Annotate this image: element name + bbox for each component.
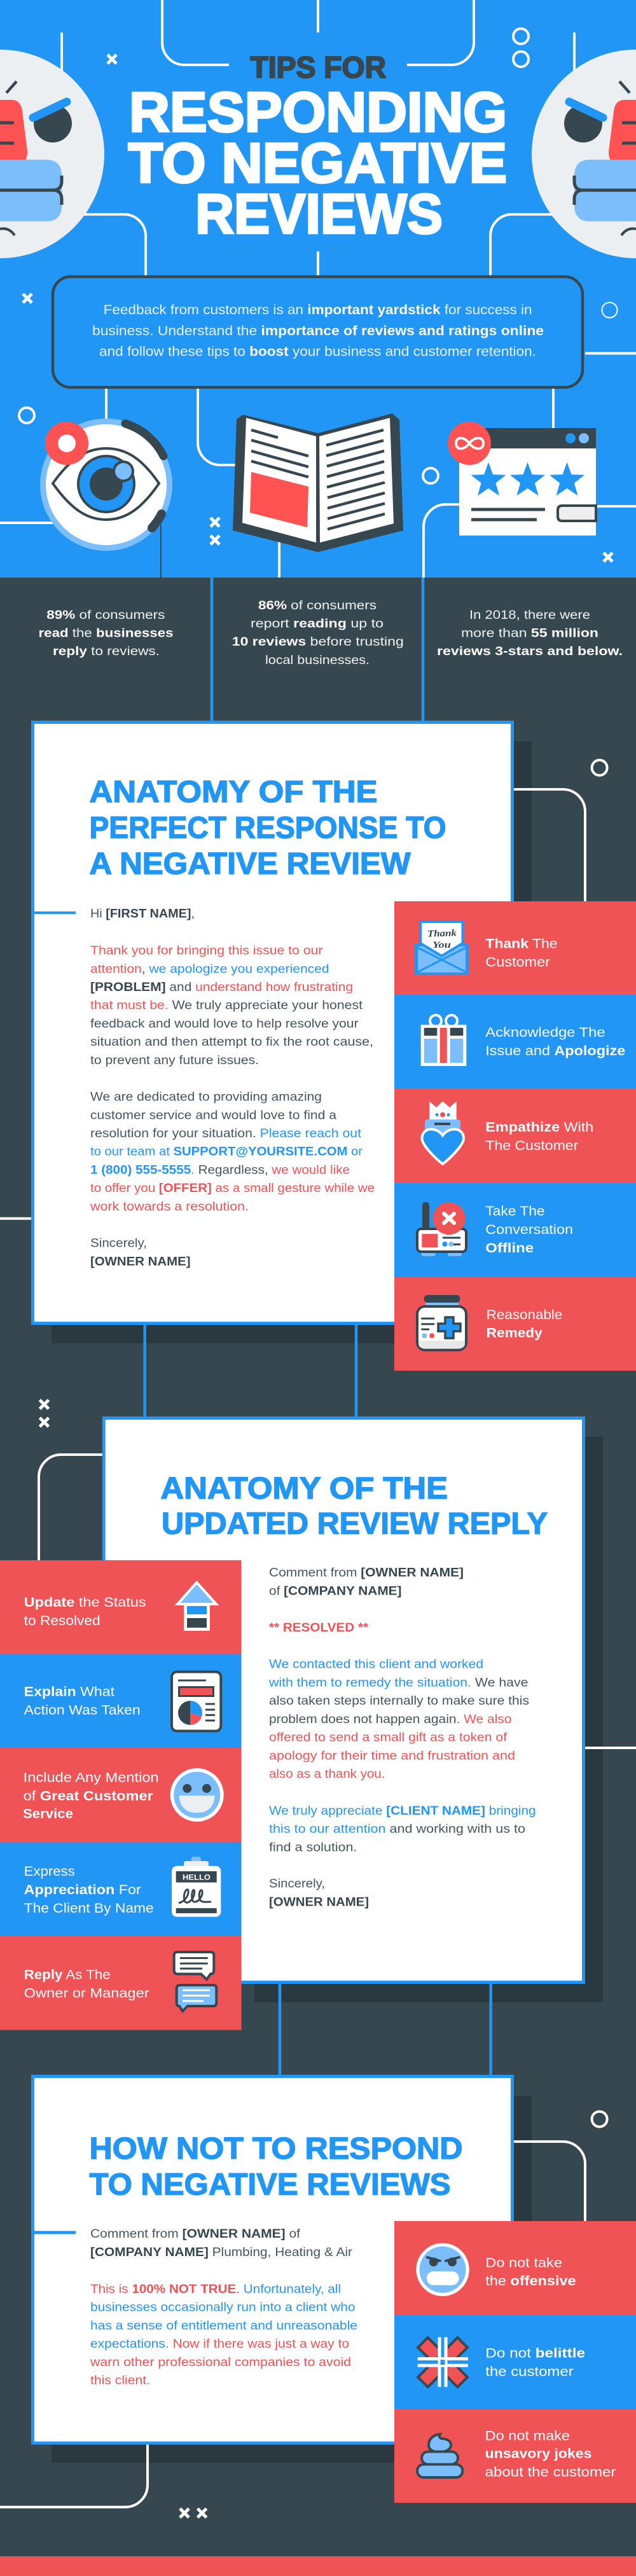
text block: response letter: resolution for your situation. Please reach out	[90, 1127, 362, 1140]
heading: anatomy of the perfect response	[89, 775, 446, 881]
text block: bad reply example: businesses occasionally run into a client who	[90, 2301, 355, 2315]
text block: resolved reply: We truly appreciate [CLIENT NAME] bringing	[269, 1804, 536, 1818]
panel: updated review reply	[104, 1418, 583, 1982]
icon: hello name badge: HELLO	[183, 1874, 211, 1881]
dark section connectors and marks	[0, 741, 636, 2517]
stat: 89 percent: read the businesses	[38, 626, 174, 640]
stat: 55 million: In 2018, there were	[469, 608, 590, 622]
step: reply as owner	[0, 1936, 242, 2030]
stat: 89 percent: 89% of consumers	[46, 608, 165, 622]
heading: how not to respond: HOW NOT TO RESPOND	[89, 2132, 463, 2166]
step: empathize: The Customer	[485, 1138, 578, 1153]
icon: smiling face	[170, 1768, 224, 1822]
step: reasonable remedy	[394, 1277, 636, 1371]
icon: gift	[421, 1015, 466, 1066]
icon: angry face right	[532, 50, 636, 258]
intro callout box	[53, 277, 583, 387]
text block: resolved reply: ** RESOLVED **	[269, 1621, 369, 1635]
text block: bad reply example	[90, 2227, 357, 2388]
icon: x marks and rings	[19, 29, 617, 562]
heading: how not to respond	[89, 2132, 463, 2201]
text block: resolved reply	[268, 1567, 536, 1909]
footer bar	[0, 2556, 636, 2576]
step: express appreciation: Express	[24, 1864, 75, 1879]
step: include great customer service: of Great Customer	[24, 1789, 153, 1804]
icon: open book	[233, 413, 403, 552]
text block: resolved reply: also taken steps internally to make sure this	[269, 1694, 529, 1708]
heading: anatomy of the perfect response: PERFECT RESPONSE TO	[89, 812, 446, 845]
text block: resolved reply: find a solution.	[269, 1841, 357, 1854]
item: do not make unsavory jokes: unsavory jokes	[485, 2446, 591, 2462]
intro callout box: and follow these tips to boost your business and customer retention.	[99, 345, 536, 359]
panel: perfect response letter	[33, 723, 513, 1323]
intro callout box: business. Understand the importance of reviews and ratings online	[92, 324, 544, 338]
title: TIPS FOR	[251, 50, 386, 84]
stat: 89 percent	[38, 608, 174, 658]
icon: crossed arrows	[418, 2337, 468, 2387]
title: TO NEGATIVE	[128, 132, 507, 195]
stat: 55 million: more than 55 million	[461, 626, 598, 640]
icon: eye	[40, 419, 172, 551]
stat: 55 million: reviews 3-stars and below.	[437, 644, 623, 658]
step: empathize: Empathize With	[485, 1119, 593, 1135]
text block: response letter: to prevent any future issues.	[90, 1054, 259, 1067]
stat: 86 percent: local businesses.	[265, 653, 370, 667]
step: update status	[0, 1560, 242, 1654]
heading: how not to respond: TO NEGATIVE REVIEWS	[89, 2168, 450, 2201]
statistics row	[38, 578, 623, 722]
step: thank the customer	[394, 901, 636, 995]
text block: resolved reply: problem does not happen again. We also	[269, 1713, 511, 1726]
panel: five response steps	[394, 901, 636, 1371]
text block: response letter: [OWNER NAME]	[90, 1255, 191, 1268]
step: acknowledge and apologize	[394, 995, 636, 1089]
step: update status: Update the Status	[24, 1595, 146, 1610]
step: explain action: Explain What	[24, 1684, 114, 1699]
item: do not take the offensive	[394, 2221, 636, 2315]
text block: resolved reply: We contacted this client and worked	[269, 1658, 483, 1672]
item: do not belittle: Do not belittle	[485, 2346, 585, 2361]
item: do not take the offensive: the offensive	[485, 2273, 576, 2289]
text block: resolved reply: [OWNER NAME]	[269, 1895, 369, 1909]
text block: bad reply example: [COMPANY NAME] Plumbing, Heating & Air	[90, 2246, 353, 2259]
heading: anatomy of the updated reply	[160, 1472, 548, 1541]
step: reply as owner: Owner or Manager	[24, 1985, 149, 2000]
text block: bad reply example: has a sense of entitlement and unreasonable	[90, 2319, 357, 2332]
panel: three things to avoid	[394, 2221, 636, 2503]
icon: thank you envelope: Thank	[427, 928, 457, 939]
step: take offline: Conversation	[485, 1222, 573, 1237]
icon: poop pile	[417, 2434, 462, 2477]
step: express appreciation: The Client By Name	[24, 1901, 154, 1916]
stat: 86 percent: 86% of consumers	[258, 599, 377, 613]
text block: response letter: customer service and would love to find a	[90, 1109, 336, 1122]
text block: resolved reply: Comment from [OWNER NAME]	[269, 1567, 464, 1580]
icon: report page	[172, 1672, 221, 1731]
step: explain action: Action Was Taken	[24, 1702, 141, 1717]
icon: thank you envelope: You	[432, 940, 451, 950]
title: REVIEWS	[195, 182, 443, 246]
step: thank the customer: Thank The	[485, 936, 558, 951]
heading: anatomy of the updated reply: ANATOMY OF THE	[160, 1472, 448, 1506]
item: do not make unsavory jokes	[394, 2409, 636, 2503]
text block: response letter: situation and then attempt to fix the root cause,	[90, 1035, 373, 1049]
step: express appreciation	[0, 1842, 242, 1936]
text block: response letter: We are dedicated to providing amazing	[90, 1091, 322, 1104]
step: take offline: Take The	[485, 1203, 545, 1219]
icon: thank you envelope	[415, 922, 469, 974]
step: empathize	[394, 1089, 636, 1183]
heading: anatomy of the perfect response: A NEGATIVE REVIEW	[89, 847, 411, 881]
text block: resolved reply: offered to send a small gift as a token of	[269, 1731, 508, 1745]
text block: response letter: [PROBLEM] and understand how frustrating	[90, 981, 353, 994]
step: include great customer service: Service	[23, 1806, 73, 1822]
step: thank the customer: Customer	[485, 954, 550, 969]
decorative connector lines	[0, 0, 636, 578]
step: include great customer service: Include Any Mention	[24, 1769, 159, 1785]
icon: up arrow	[177, 1582, 216, 1630]
text block: response letter: Hi [FIRST NAME] ,	[90, 908, 195, 921]
text block: bad reply example: This is 100% NOT TRUE . Unfortunately, all	[90, 2283, 341, 2296]
hero section: blue header	[0, 0, 636, 578]
item: do not belittle: the customer	[485, 2364, 574, 2379]
text block: bad reply example: Comment from [OWNER NAME] of	[90, 2227, 301, 2241]
text block: resolved reply: with them to remedy the situation. We have	[268, 1676, 528, 1689]
item: do not make unsavory jokes: about the customer	[485, 2465, 616, 2480]
text block: response letter: feedback and would love to help resolve your	[90, 1017, 359, 1030]
step: reasonable remedy: Reasonable	[487, 1307, 562, 1322]
icon: medicine jar	[417, 1295, 466, 1350]
title	[128, 50, 507, 246]
text block: resolved reply: this to our attention and working with us to	[269, 1823, 525, 1836]
heading: anatomy of the updated reply: UPDATED REVIEW REPLY	[162, 1507, 548, 1541]
step: take offline: Offline	[485, 1240, 534, 1256]
step: update status: to Resolved	[24, 1613, 100, 1628]
stat: 89 percent: reply to reviews.	[53, 644, 160, 658]
step: include great customer service	[0, 1748, 242, 1842]
panel: five reply steps	[0, 1560, 242, 2030]
icon: radio with x badge	[417, 1202, 466, 1256]
icon: star rating window	[448, 422, 596, 536]
text block: response letter: 1 (800) 555-5555 . Regardless, we would like	[90, 1163, 350, 1177]
text block: resolved reply: of [COMPANY NAME]	[269, 1584, 402, 1598]
stat: 86 percent: report reading up to	[251, 617, 384, 631]
text block: response letter: Thank you for bringing this issue to our	[90, 945, 323, 958]
stat: 86 percent	[232, 599, 404, 667]
text block: response letter: Sincerely,	[90, 1237, 147, 1250]
step: explain action	[0, 1654, 242, 1748]
text block: resolved reply: also as a thank you.	[269, 1768, 385, 1781]
icon: angry face	[416, 2243, 469, 2296]
heading: anatomy of the perfect response: ANATOMY OF THE	[89, 775, 378, 809]
item: do not make unsavory jokes: Do not make	[485, 2428, 570, 2443]
text block: response letter: that must be. We truly appreciate your honest	[90, 999, 363, 1013]
text block: response letter	[90, 908, 375, 1268]
step: reply as owner: Reply As The	[24, 1967, 111, 1982]
stat: 55 million	[437, 608, 623, 658]
stat: 86 percent: 10 reviews before trusting	[232, 635, 404, 649]
text block: resolved reply: Sincerely,	[269, 1878, 325, 1890]
step: express appreciation: Appreciation For	[24, 1882, 141, 1897]
step: take offline	[394, 1183, 636, 1277]
intro callout box: Feedback from customers is an important yardstick for success in	[104, 303, 532, 317]
text block: response letter: attention , we apologize you experienced	[90, 962, 329, 976]
text block: response letter: work towards a resolution.	[90, 1200, 249, 1214]
text block: bad reply example: this client.	[90, 2374, 150, 2388]
title: RESPONDING	[129, 80, 507, 144]
icon: hello name badge	[172, 1857, 221, 1917]
step: reasonable remedy: Remedy	[487, 1325, 543, 1340]
step: acknowledge and apologize: Issue and Apologize	[485, 1043, 625, 1058]
icon: angry face left	[0, 50, 104, 258]
panel: how not to respond	[33, 2076, 513, 2443]
text block: bad reply example: warn other professional companies to avoid	[90, 2356, 351, 2369]
item: do not belittle	[394, 2315, 636, 2409]
step: acknowledge and apologize: Acknowledge The	[485, 1025, 605, 1040]
item: do not take the offensive: Do not take	[485, 2255, 562, 2270]
text block: bad reply example: expectations. Now if there was just a way to	[90, 2337, 349, 2351]
text block: response letter: to offer you [OFFER] as a small gesture while we	[90, 1182, 375, 1195]
text block: response letter: to our team at SUPPORT@YOURSITE.COM or	[90, 1146, 363, 1159]
icon: chat bubbles	[174, 1952, 216, 2011]
icon: crowned heart	[422, 1102, 464, 1164]
text block: resolved reply: apology for their time and frustration and	[269, 1749, 515, 1762]
